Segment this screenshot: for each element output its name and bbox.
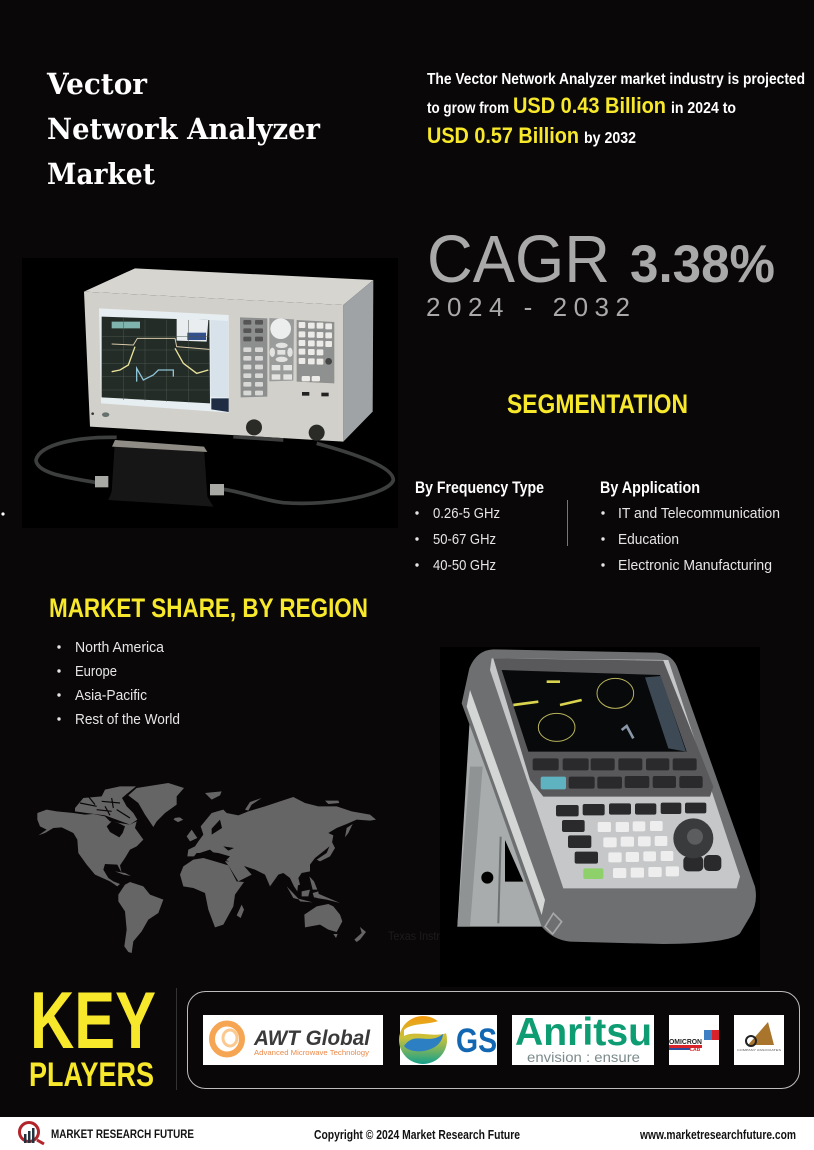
logo: Omicron Lab: OMICRON xyxy=(669,1039,702,1046)
CAGR callout: CAGR xyxy=(427,222,610,297)
segment list: by application: By Application xyxy=(600,478,700,497)
segment list: by frequency type: 50-67 GHz xyxy=(433,531,496,548)
logo: company mark xyxy=(734,1015,784,1065)
world map xyxy=(37,783,376,953)
footer logo xyxy=(20,1122,44,1144)
footer bar: Copyright © 2024 Market Research Future xyxy=(314,1128,520,1142)
logo: GS: GS xyxy=(456,1022,497,1060)
CAGR callout: 2024 - 2032 xyxy=(426,292,630,322)
segment list: by application: Education xyxy=(618,531,679,548)
segment list: by frequency type: 0.26-5 GHz xyxy=(433,505,500,522)
region list: Europe xyxy=(75,663,117,680)
logo: GS xyxy=(399,1015,497,1065)
region list: Rest of the World xyxy=(75,711,180,728)
title: Network Analyzer xyxy=(47,112,321,146)
title: Market xyxy=(47,157,156,191)
segmentation heading: SEGMENTATION xyxy=(507,389,688,419)
market projection text: in 2024 to xyxy=(671,100,736,117)
market projection text: USD 0.57 Billion xyxy=(427,123,579,148)
logo: AWT Global: Advanced Microwave Technology xyxy=(254,1048,369,1057)
logo: Omicron Lab xyxy=(669,1015,719,1065)
logo: AWT Global: AWT Global xyxy=(253,1027,371,1050)
title xyxy=(46,67,321,191)
market projection text: USD 0.43 Billion xyxy=(513,93,666,118)
logo: AWT Global xyxy=(203,1015,383,1065)
key players panel xyxy=(188,992,800,1088)
segment list: by frequency type: By Frequency Type xyxy=(415,478,544,497)
market projection text: by 2032 xyxy=(584,130,636,147)
CAGR callout: 3.38% xyxy=(630,235,775,294)
logo: company mark: COMPANY ASSOCIATES xyxy=(737,1048,781,1052)
key players heading: KEY xyxy=(30,976,156,1066)
footer bar xyxy=(0,1117,814,1150)
CAGR callout xyxy=(426,222,775,322)
logo: Anritsu: Anritsu xyxy=(515,1011,652,1054)
product photo: handheld analyzer xyxy=(440,647,760,987)
segment list: by application xyxy=(600,478,780,574)
key players heading: PLAYERS xyxy=(29,1056,154,1094)
market share heading: MARKET SHARE, BY REGION xyxy=(49,593,368,623)
decorative marker dot xyxy=(1,512,5,516)
region list xyxy=(57,639,180,728)
segment list: by application: Electronic Manufacturing xyxy=(618,557,772,574)
segment list: by frequency type xyxy=(415,478,544,574)
market projection text: to grow from xyxy=(427,100,509,117)
region list: North America xyxy=(75,639,165,656)
segment list: by application: IT and Telecommunication xyxy=(618,505,780,522)
logo: Anritsu: envision : ensure xyxy=(527,1049,640,1065)
segment list: by frequency type: 40-50 GHz xyxy=(433,557,496,574)
footer bar: MARKET RESEARCH FUTURE xyxy=(51,1127,194,1141)
region list: Asia-Pacific xyxy=(75,687,147,704)
key players heading xyxy=(29,976,156,1094)
faint background text: Texas Instr xyxy=(388,929,440,943)
market projection text xyxy=(427,71,805,148)
logo: Omicron Lab: LAB xyxy=(690,1047,701,1053)
product photo: benchtop analyzer xyxy=(22,258,398,528)
title: Vector xyxy=(46,67,148,101)
